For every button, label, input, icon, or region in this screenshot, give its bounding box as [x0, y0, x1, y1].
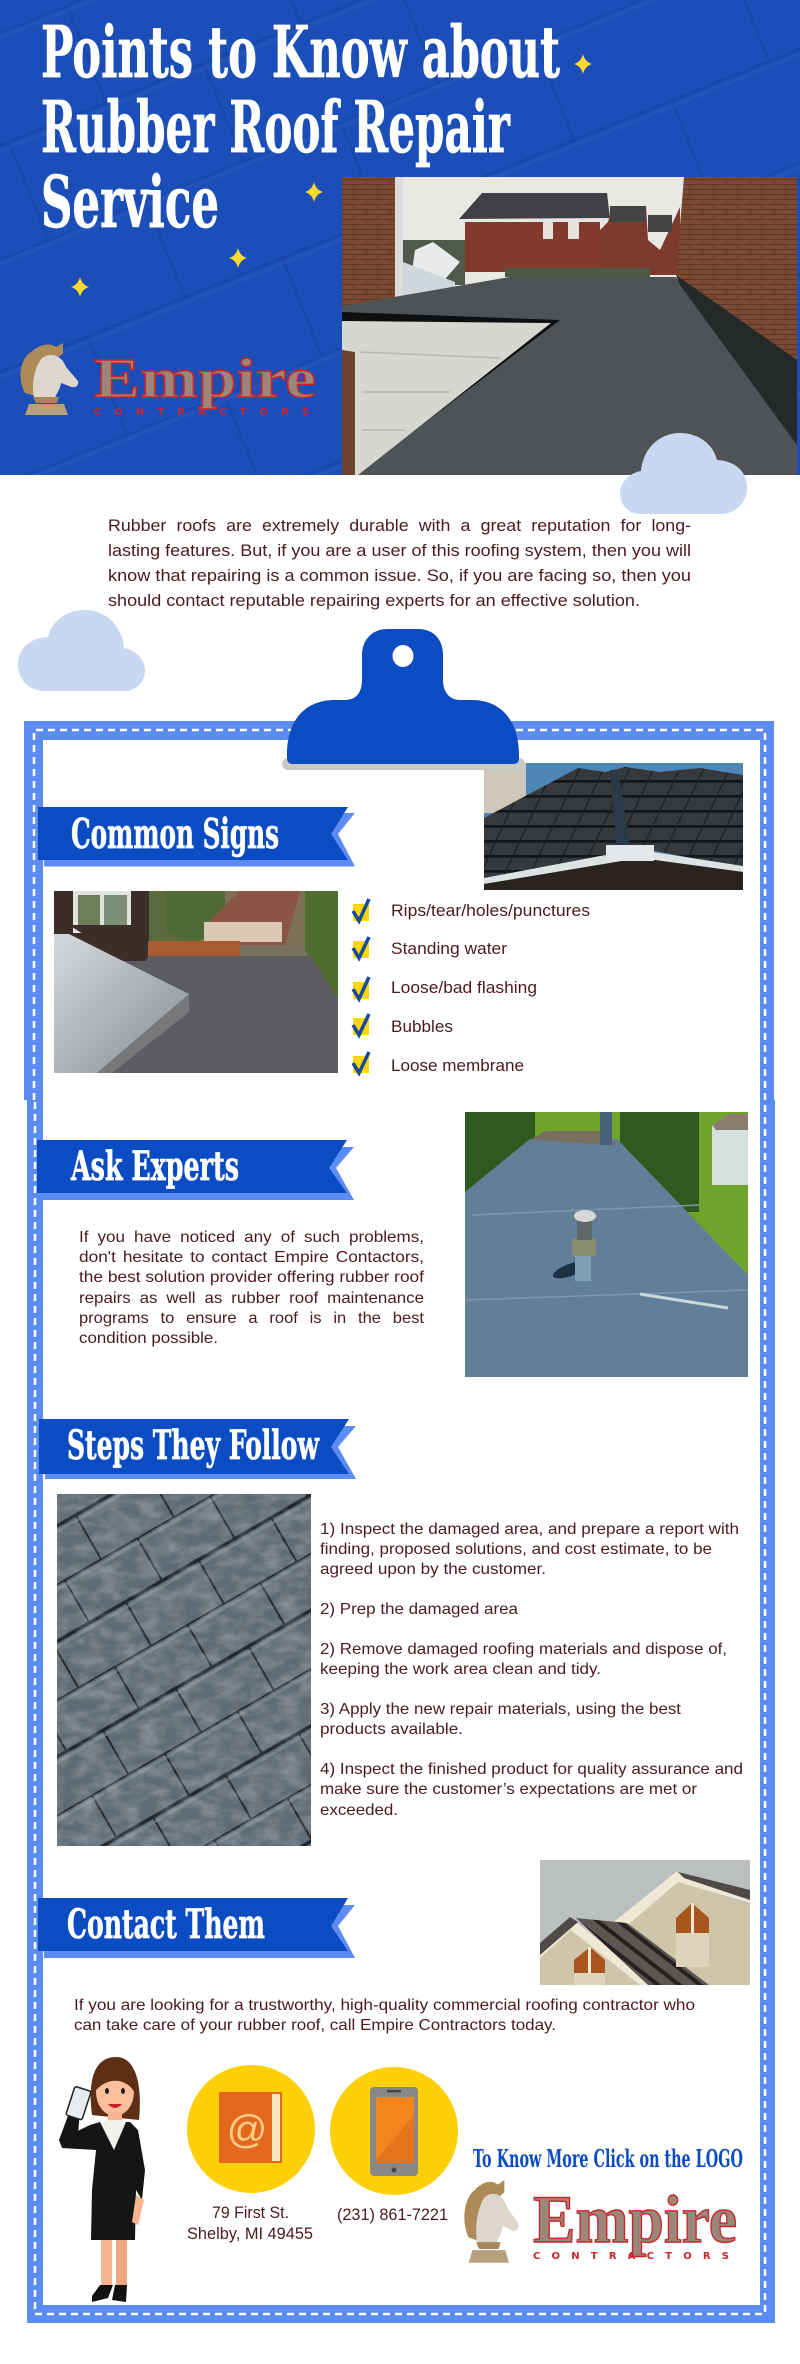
address: Shelby, MI 49455: [187, 2224, 313, 2243]
icon: address book: @: [227, 2108, 267, 2152]
logo: Empire Contractors bottom: CONTRACTORS: [533, 2251, 729, 2262]
cloud: left: [18, 610, 145, 691]
banner: Steps They Follow: [39, 1419, 356, 1479]
main frame: [24, 721, 775, 2323]
intro paragraph: Rubber roofs are extremely durable with a great reputation for long-: [108, 516, 691, 535]
address: 79 First St.: [212, 2203, 289, 2222]
banner: Common Signs: [38, 807, 355, 866]
paragraph: Ask Experts: If you have noticed any of such problems,: [79, 1229, 424, 1246]
intro paragraph: [108, 516, 691, 610]
paragraph: steps: 2) Remove damaged roofing materials and dispose of,: [320, 1641, 727, 1658]
check item 3: Loose/bad flashing: [391, 979, 537, 997]
photo: tiled roof with gutter: [484, 763, 743, 890]
icon: stars: [71, 54, 592, 297]
checklist: [353, 899, 590, 1075]
icon: address book: [187, 2065, 315, 2193]
photo: rubber roof with vent: [465, 1112, 748, 1377]
banner: Contact Them: Contact Them: [67, 1901, 265, 1948]
paragraph: Ask Experts: the best solution provider offering rubber roof: [79, 1269, 425, 1286]
paragraph: Ask Experts: don't hesitate to contact Empire Contactors,: [79, 1249, 424, 1266]
photo: slate tiles: [57, 1494, 311, 1846]
photo: flat rubber roof between houses: [342, 177, 797, 475]
check item 4: Bubbles: [391, 1018, 453, 1036]
banner: Common Signs: Common Signs: [71, 810, 279, 858]
check item 4: [353, 1014, 453, 1036]
paragraph: contact: [74, 1997, 695, 2034]
check item 2: [353, 937, 508, 958]
paragraph: steps: 1) Inspect the damaged area, and prepare a report with: [320, 1521, 739, 1538]
phone number: (231) 861-7221: [337, 2205, 448, 2224]
check item 1: [353, 899, 590, 921]
logo: Empire Contractors: Empire: [94, 348, 316, 410]
paragraph: steps: agreed upon by the customer.: [320, 1561, 546, 1578]
icon: smartphone: [330, 2067, 458, 2195]
check item 1: Rips/tear/holes/punctures: [391, 902, 590, 920]
check item 5: Loose membrane: [391, 1057, 524, 1075]
intro paragraph: should contact reputable repairing experts for an effective solution.: [108, 591, 640, 610]
paragraph: steps: 3) Apply the new repair materials, using the best: [320, 1701, 682, 1718]
paragraph: steps: 4) Inspect the finished product for quality assurance and: [320, 1761, 743, 1778]
check item 3: [353, 977, 537, 999]
paragraph: steps: finding, proposed solutions, and cost estimate, to be: [320, 1541, 712, 1558]
paragraph: steps: [320, 1521, 743, 1819]
logo: Empire Contractors: [20, 343, 316, 418]
paragraph: steps: exceeded.: [320, 1802, 398, 1819]
check item 2: Standing water: [391, 940, 508, 958]
paragraph: contact: If you are looking for a trustworthy, high-quality commercial roofing contractor who: [74, 1997, 695, 2014]
paragraph: steps: products available.: [320, 1721, 463, 1738]
cloud: top right: [620, 433, 747, 514]
paragraph: Ask Experts: programs to ensure a roof is in the best: [79, 1310, 425, 1327]
photo: house gables: [540, 1860, 750, 1985]
paragraph: steps: keeping the work area clean and tidy.: [320, 1661, 601, 1678]
logo: Empire Contractors: CONTRACTORS: [94, 407, 309, 418]
paragraph: Ask Experts: [79, 1229, 425, 1347]
paragraph: contact: can take care of your rubber roof, call Empire Contractors today.: [74, 2017, 556, 2034]
paragraph: Ask Experts: repairs as well as rubber roof maintenance: [79, 1290, 424, 1307]
banner: Steps They Follow: Steps They Follow: [67, 1422, 320, 1469]
address: [187, 2203, 313, 2243]
title: Service: [41, 160, 219, 244]
paragraph: steps: make sure the customer’s expectations are met or: [320, 1781, 698, 1798]
banner: Ask Experts: Ask Experts: [70, 1143, 239, 1190]
banner: Ask Experts: [37, 1140, 354, 1200]
photo: flat roof with skylight: [54, 891, 338, 1073]
illustration: woman on the phone: [59, 2057, 145, 2302]
paragraph: Ask Experts: condition possible.: [79, 1330, 218, 1347]
logo: Empire Contractors bottom: Empire: [533, 2181, 737, 2257]
check item 5: [353, 1052, 524, 1075]
paragraph: steps: 2) Prep the damaged area: [320, 1601, 518, 1618]
logo: Empire Contractors bottom: [464, 2180, 737, 2263]
clip shape: [282, 629, 525, 770]
header panel: [0, 0, 800, 475]
intro paragraph: know that repairing is a common issue. So, if you are facing so, then you: [108, 566, 691, 585]
title: [41, 10, 560, 244]
intro paragraph: lasting features. But, if you are a user of this roofing system, then you will: [108, 541, 691, 560]
banner: Contact Them: [38, 1898, 355, 1958]
